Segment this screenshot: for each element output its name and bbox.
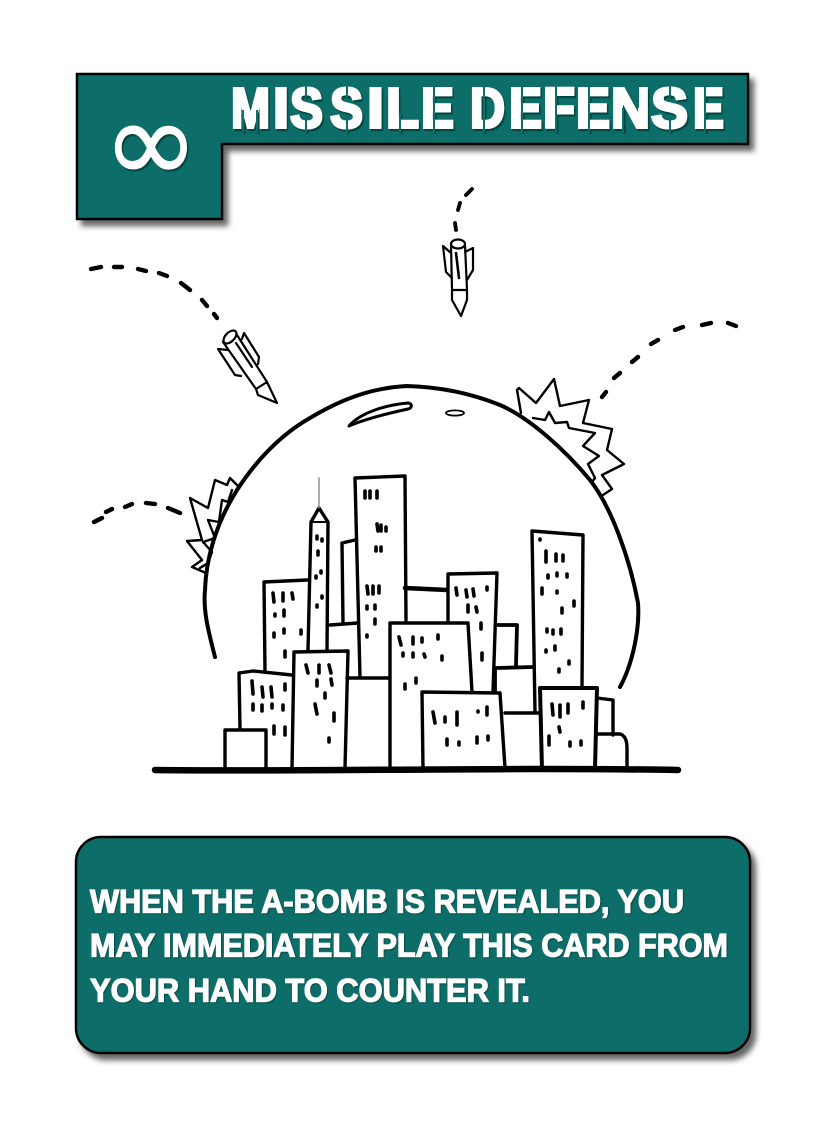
header banner xyxy=(77,74,748,219)
title: S xyxy=(330,76,363,140)
title: F xyxy=(543,76,575,140)
dome glint long xyxy=(349,403,411,426)
title: M xyxy=(231,76,270,140)
icon: infinity symbol: ∞ xyxy=(103,76,199,210)
city skyline xyxy=(155,476,678,770)
dome xyxy=(205,386,638,687)
title xyxy=(231,76,724,140)
title: E xyxy=(576,76,610,140)
tall building outlines xyxy=(225,476,627,770)
title: L xyxy=(386,76,419,140)
title: E xyxy=(421,76,454,140)
icon: missile top xyxy=(443,240,473,316)
building windows xyxy=(252,491,583,746)
title: E xyxy=(509,76,542,140)
icon: missile left xyxy=(218,328,277,403)
dashed trail: upper left xyxy=(91,267,217,318)
rules text: WHEN THE A-BOMB IS REVEALED, YOU xyxy=(90,884,684,920)
title: D xyxy=(470,76,505,140)
title: I xyxy=(367,76,384,140)
dome glint small xyxy=(446,410,464,416)
dashed trail: left xyxy=(94,503,180,522)
title: I xyxy=(273,76,289,140)
title: S xyxy=(290,76,323,140)
title: S xyxy=(651,76,688,140)
title: E xyxy=(693,76,724,140)
rules text xyxy=(90,884,728,1008)
rules text: MAY IMMEDIATELY PLAY THIS CARD FROM xyxy=(90,928,728,964)
ground line xyxy=(155,769,678,770)
rules text: YOUR HAND TO COUNTER IT. xyxy=(90,972,530,1008)
title: N xyxy=(611,76,650,140)
dashed trail: top xyxy=(455,189,472,230)
explosion right xyxy=(517,379,624,495)
rules text panel xyxy=(76,837,750,1053)
dashed trail: right xyxy=(602,323,736,397)
explosion left xyxy=(187,478,237,573)
